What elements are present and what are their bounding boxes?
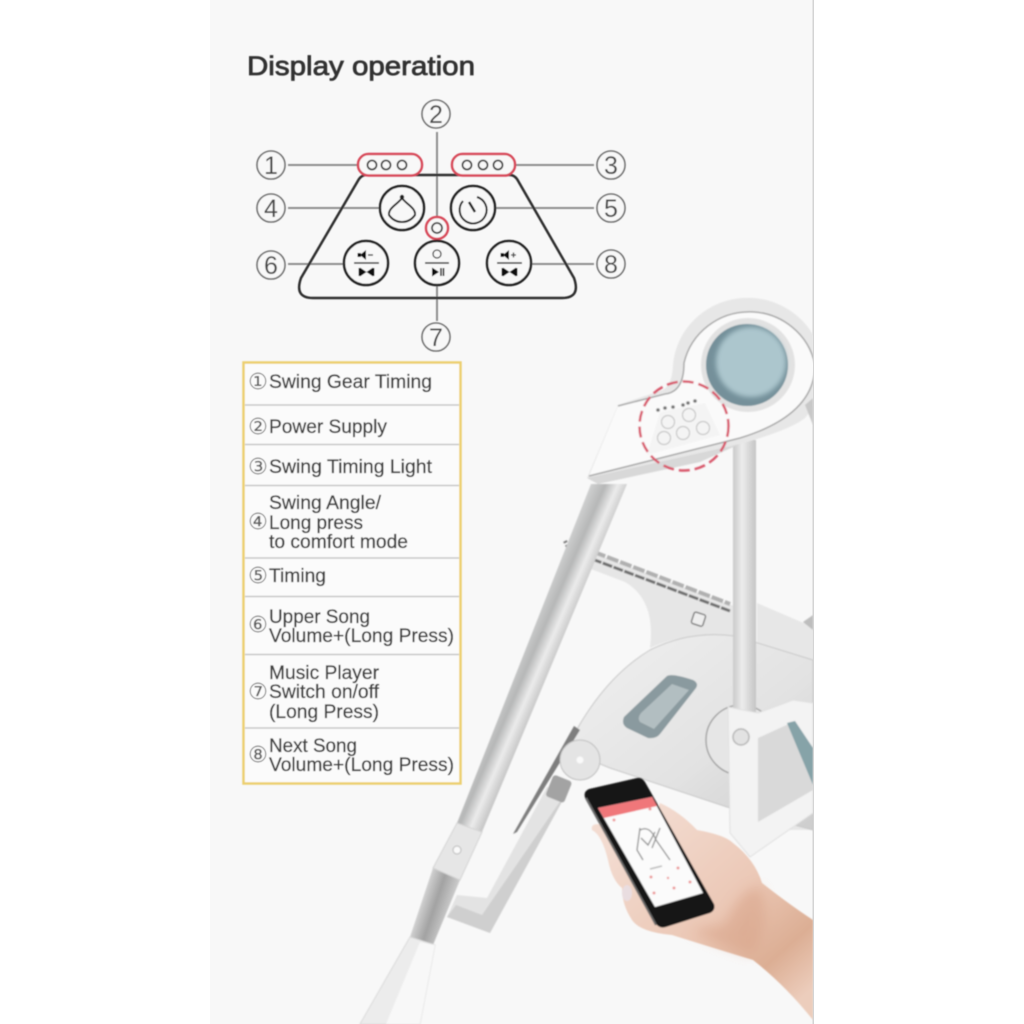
legend table	[244, 362, 460, 784]
small square	[691, 612, 706, 627]
legend labels: Timing	[269, 566, 326, 587]
title: Display operation	[247, 51, 475, 81]
button: music player	[415, 241, 459, 285]
foot	[360, 937, 435, 1024]
legend labels: Long press	[269, 513, 363, 534]
indicator lights 3	[452, 154, 515, 176]
fingernail	[622, 885, 632, 901]
legend labels: Upper Song	[269, 607, 370, 628]
callout digits: 1	[264, 152, 278, 180]
legend numbers: ⑧	[248, 743, 268, 768]
callout digits	[264, 101, 618, 352]
pole collar	[433, 823, 482, 880]
callout digits: 8	[604, 251, 618, 279]
button: upper song	[344, 241, 388, 285]
legend labels: Swing Angle/	[269, 493, 382, 514]
legend labels: Music Player	[269, 663, 380, 684]
legend numbers: ④	[248, 510, 268, 535]
callout numbers	[257, 100, 625, 351]
legend labels: Swing Gear Timing	[269, 372, 432, 393]
vertical rear pole	[733, 440, 756, 720]
legend labels: Volume+(Long Press)	[269, 755, 454, 776]
hand holding phone	[585, 778, 813, 1020]
app label	[650, 866, 662, 869]
swing rear body	[757, 603, 813, 830]
leader lines	[288, 132, 594, 321]
legend numbers: ⑦	[248, 680, 268, 705]
legend numbers: ③	[248, 455, 268, 480]
legend numbers: ⑥	[248, 613, 268, 638]
button: swing angle	[380, 186, 424, 230]
phone	[585, 778, 714, 928]
legend labels: to comfort mode	[269, 532, 408, 553]
callout digits: 4	[264, 195, 278, 223]
head housing	[587, 298, 823, 484]
legend numbers	[248, 370, 268, 768]
hand	[592, 803, 813, 1020]
mini control panel	[656, 398, 711, 446]
legend labels: Swing Timing Light	[269, 457, 433, 478]
callout digits: 7	[429, 324, 443, 352]
power light	[426, 217, 448, 239]
legend numbers: ①	[248, 370, 268, 395]
callout digits: 3	[604, 152, 618, 180]
seat slats	[565, 541, 730, 611]
wrist shading	[690, 888, 764, 955]
baby swing product illustration	[360, 298, 823, 1024]
phone side edge	[586, 798, 656, 925]
long front pole	[457, 484, 627, 832]
seat upper bracket	[592, 556, 733, 648]
callout digits: 6	[264, 252, 278, 280]
legend labels: Switch on/off	[269, 682, 380, 703]
app header	[598, 797, 657, 818]
hub ring	[706, 705, 776, 775]
callout digits: 5	[604, 195, 618, 223]
control panel diagram	[257, 100, 625, 352]
phone screen	[598, 797, 703, 907]
swing motor body	[566, 635, 813, 830]
indicator lights 1	[358, 154, 422, 176]
legend numbers: ⑤	[248, 564, 268, 589]
app buttons	[612, 808, 692, 894]
slider window	[545, 774, 572, 803]
legend labels: Next Song	[269, 736, 357, 757]
bracket shadow strip	[513, 726, 580, 834]
joint	[560, 740, 600, 780]
legend labels	[269, 372, 454, 776]
head disc	[701, 318, 795, 412]
panel outline	[299, 175, 576, 298]
background panel	[210, 0, 814, 1024]
lower pole	[410, 868, 460, 945]
lower bracket	[447, 787, 570, 933]
rear frame	[728, 700, 813, 857]
red dashed circle	[640, 382, 728, 470]
legend numbers: ②	[248, 415, 268, 440]
legend labels: Volume+(Long Press)	[269, 626, 454, 647]
button: timing	[451, 186, 495, 230]
app drawing	[637, 828, 670, 860]
legend labels: Power Supply	[269, 417, 387, 438]
button: next song	[487, 241, 531, 285]
callout digits: 2	[429, 101, 443, 129]
handle recess	[623, 675, 697, 738]
legend labels: (Long Press)	[269, 702, 379, 723]
